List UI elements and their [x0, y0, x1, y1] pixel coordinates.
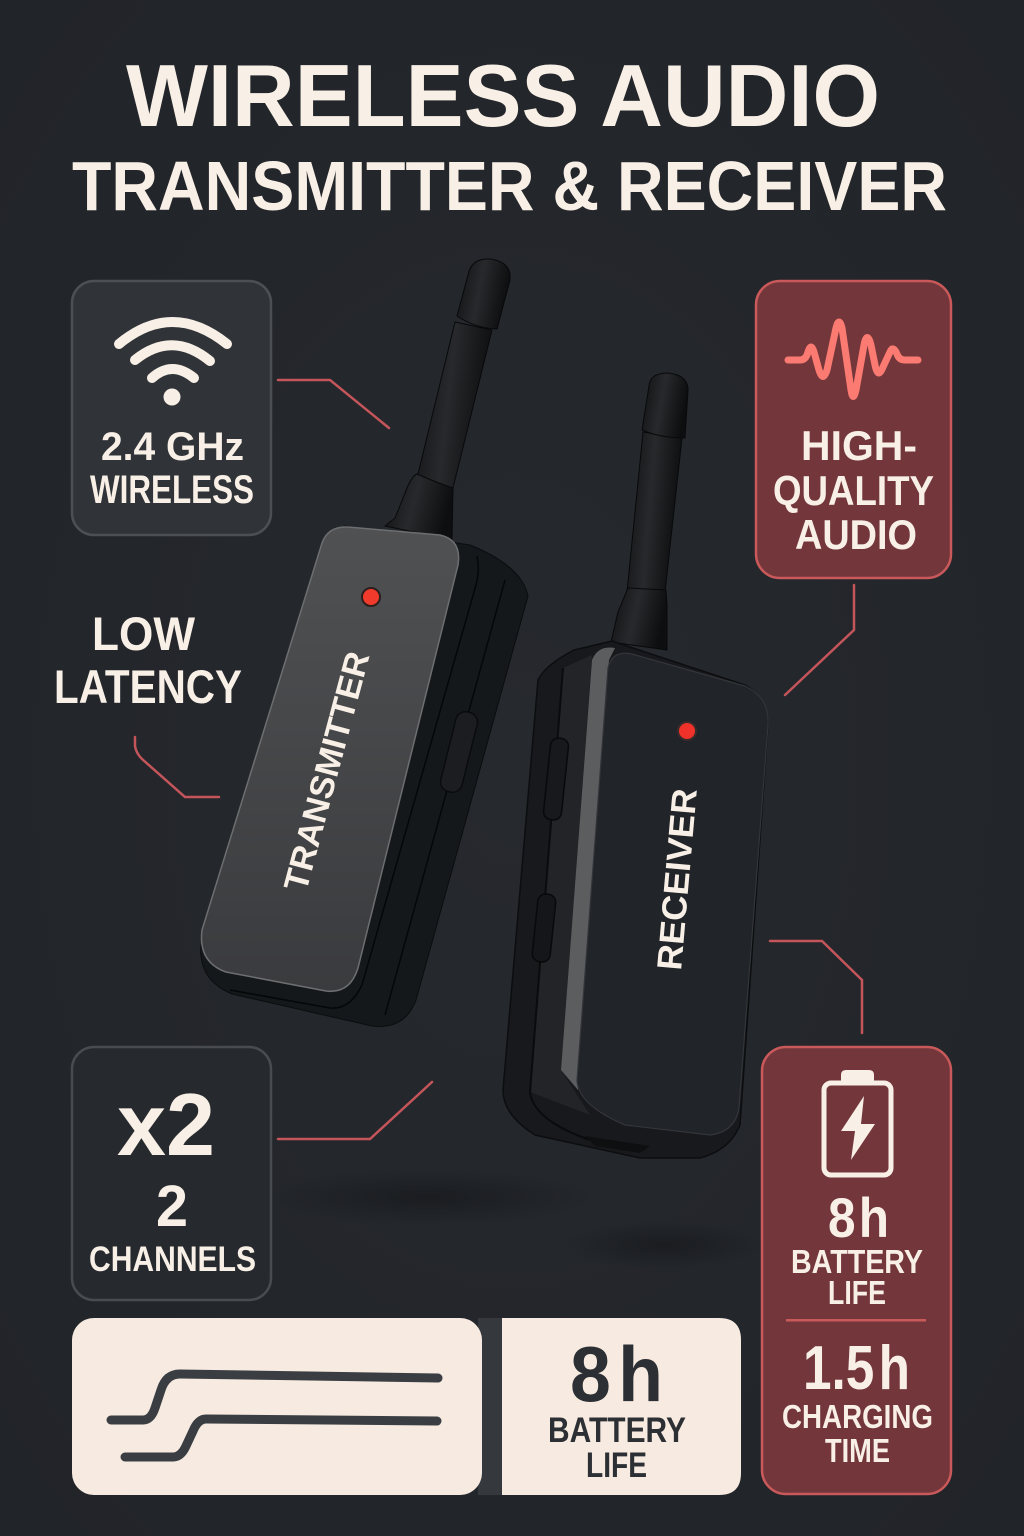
- icon: wifi: [119, 322, 227, 406]
- transmitter antenna: [385, 259, 510, 540]
- receiver seam: [530, 668, 590, 1140]
- wireless text: 2.4 GHz: [101, 425, 244, 469]
- device shadows: [265, 1169, 765, 1269]
- channels text: CHANNELS: [89, 1240, 256, 1279]
- text: low latency: [54, 607, 242, 713]
- receiver LED: [678, 722, 696, 740]
- charging text: [782, 1334, 933, 1469]
- title: [72, 46, 947, 225]
- battery text: [791, 1186, 923, 1311]
- battery text: 8 h: [828, 1186, 889, 1249]
- title: WIRELESS AUDIO: [126, 46, 880, 145]
- text: low latency: LATENCY: [54, 660, 242, 713]
- audio text: [773, 422, 934, 558]
- audio text: HIGH-: [801, 422, 917, 469]
- battery text: BATTERY: [791, 1243, 923, 1280]
- receiver side panel: [530, 655, 592, 1115]
- wireless text: [90, 425, 254, 512]
- receiver antenna: [611, 373, 688, 650]
- arrow: battery callout: [770, 941, 862, 1033]
- transmitter button: [438, 710, 480, 794]
- charging text: CHARGING: [782, 1398, 933, 1435]
- arrow: wireless callout: [278, 380, 389, 428]
- wireless text: WIRELESS: [90, 468, 254, 512]
- battery life text: 8 h: [570, 1330, 663, 1418]
- text: low latency: LOW: [92, 607, 196, 660]
- receiver body: [503, 641, 768, 1158]
- arrow: latency callout: [135, 737, 219, 797]
- battery text: LIFE: [828, 1274, 886, 1311]
- arrow: channels callout: [278, 1082, 432, 1139]
- channels text: x2: [117, 1075, 215, 1174]
- arrow: audio callout: [785, 585, 854, 695]
- transmitter label: TRANSMITTER: [277, 648, 377, 895]
- audio text: QUALITY: [773, 467, 934, 514]
- receiver device: [503, 373, 768, 1158]
- receiver port: [585, 1136, 650, 1153]
- receiver label: RECEIVER: [650, 787, 705, 972]
- receiver button top: [543, 737, 569, 821]
- transmitter device: [201, 259, 528, 1026]
- channels text: 2: [156, 1174, 188, 1239]
- receiver button bottom: [531, 893, 557, 963]
- battery life text: [548, 1330, 686, 1485]
- charging text: TIME: [825, 1432, 890, 1469]
- panel: high-quality audio: [756, 281, 951, 578]
- transmitter body: [201, 526, 528, 1026]
- transmitter LED: [362, 588, 380, 606]
- icon: signal lines: [111, 1374, 438, 1457]
- panel: battery life: [502, 1318, 741, 1495]
- audio text: AUDIO: [795, 511, 917, 558]
- battery life text: BATTERY: [548, 1411, 686, 1450]
- icon: battery: [824, 1070, 891, 1175]
- receiver face: [577, 653, 768, 1135]
- transmitter face: [202, 527, 459, 991]
- panel: channels: [72, 1047, 271, 1300]
- battery life text: LIFE: [586, 1446, 647, 1485]
- title: TRANSMITTER & RECEIVER: [72, 147, 947, 225]
- charging text: 1.5 h: [803, 1334, 910, 1403]
- panel: signal lines: [72, 1318, 482, 1495]
- panel: battery and charging: [762, 1047, 951, 1494]
- channels text: [89, 1075, 256, 1279]
- icon: waveform: [788, 322, 918, 396]
- panel: wireless: [72, 281, 271, 535]
- receiver stripe: [561, 648, 615, 1090]
